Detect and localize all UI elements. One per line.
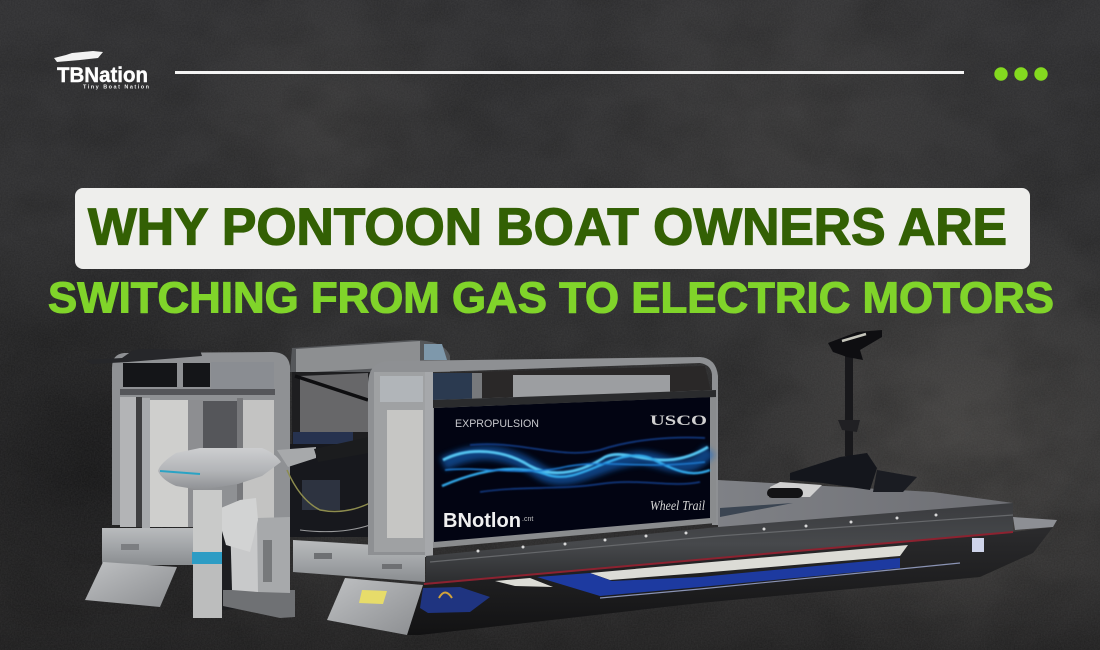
- illustration: electric pontoon boat: [85, 330, 1057, 635]
- far rear cabin frame: [283, 340, 450, 537]
- rear cable: [287, 470, 370, 511]
- icon: speedboat: [54, 51, 103, 62]
- hull yellow arc: [439, 592, 452, 598]
- logo: TBNation: [54, 51, 150, 90]
- panel branding bottom-right: Wheel Trail: [650, 499, 705, 514]
- hull blue stripe: [537, 558, 900, 596]
- hull blue patch: [420, 587, 490, 613]
- logo tagline: Tiny Boat Nation: [83, 84, 150, 90]
- outboard bracket: [216, 498, 295, 618]
- panel branding small: .cnt: [522, 516, 533, 523]
- panel branding top-right: USCO: [650, 413, 707, 429]
- three green dots: [994, 67, 1048, 81]
- title line 2: SWITCHING FROM GAS TO ELECTRIC MOTORS: [48, 274, 1054, 322]
- front cabin panel: [368, 357, 718, 557]
- header divider line: [175, 71, 964, 74]
- hull red stripe: [424, 532, 1013, 584]
- pontoon hull: [407, 527, 1053, 635]
- cabin rail opening: [433, 366, 711, 404]
- title line 1: WHY PONTOON BOAT OWNERS ARE: [88, 198, 1007, 256]
- hull white stripes: [495, 545, 908, 587]
- panel branding top-left: EXPROPULSION: [455, 418, 539, 430]
- rear transom: [102, 528, 193, 565]
- panel branding large: BNotlon: [443, 510, 521, 532]
- trolling motor: [767, 330, 917, 498]
- logo wordmark: TBNation: [57, 64, 148, 87]
- gunwale rail: [426, 503, 1013, 585]
- bow deck: [718, 480, 1013, 548]
- hull badge: [972, 538, 984, 552]
- front ramp: [327, 578, 423, 635]
- rear-left metal frame: [86, 349, 290, 540]
- electric outboard motor: [158, 437, 369, 618]
- title box: [75, 188, 1030, 269]
- electric wave graphic: [442, 438, 710, 492]
- pontoon ramps: [85, 562, 177, 607]
- cabin rail frame: [368, 357, 718, 555]
